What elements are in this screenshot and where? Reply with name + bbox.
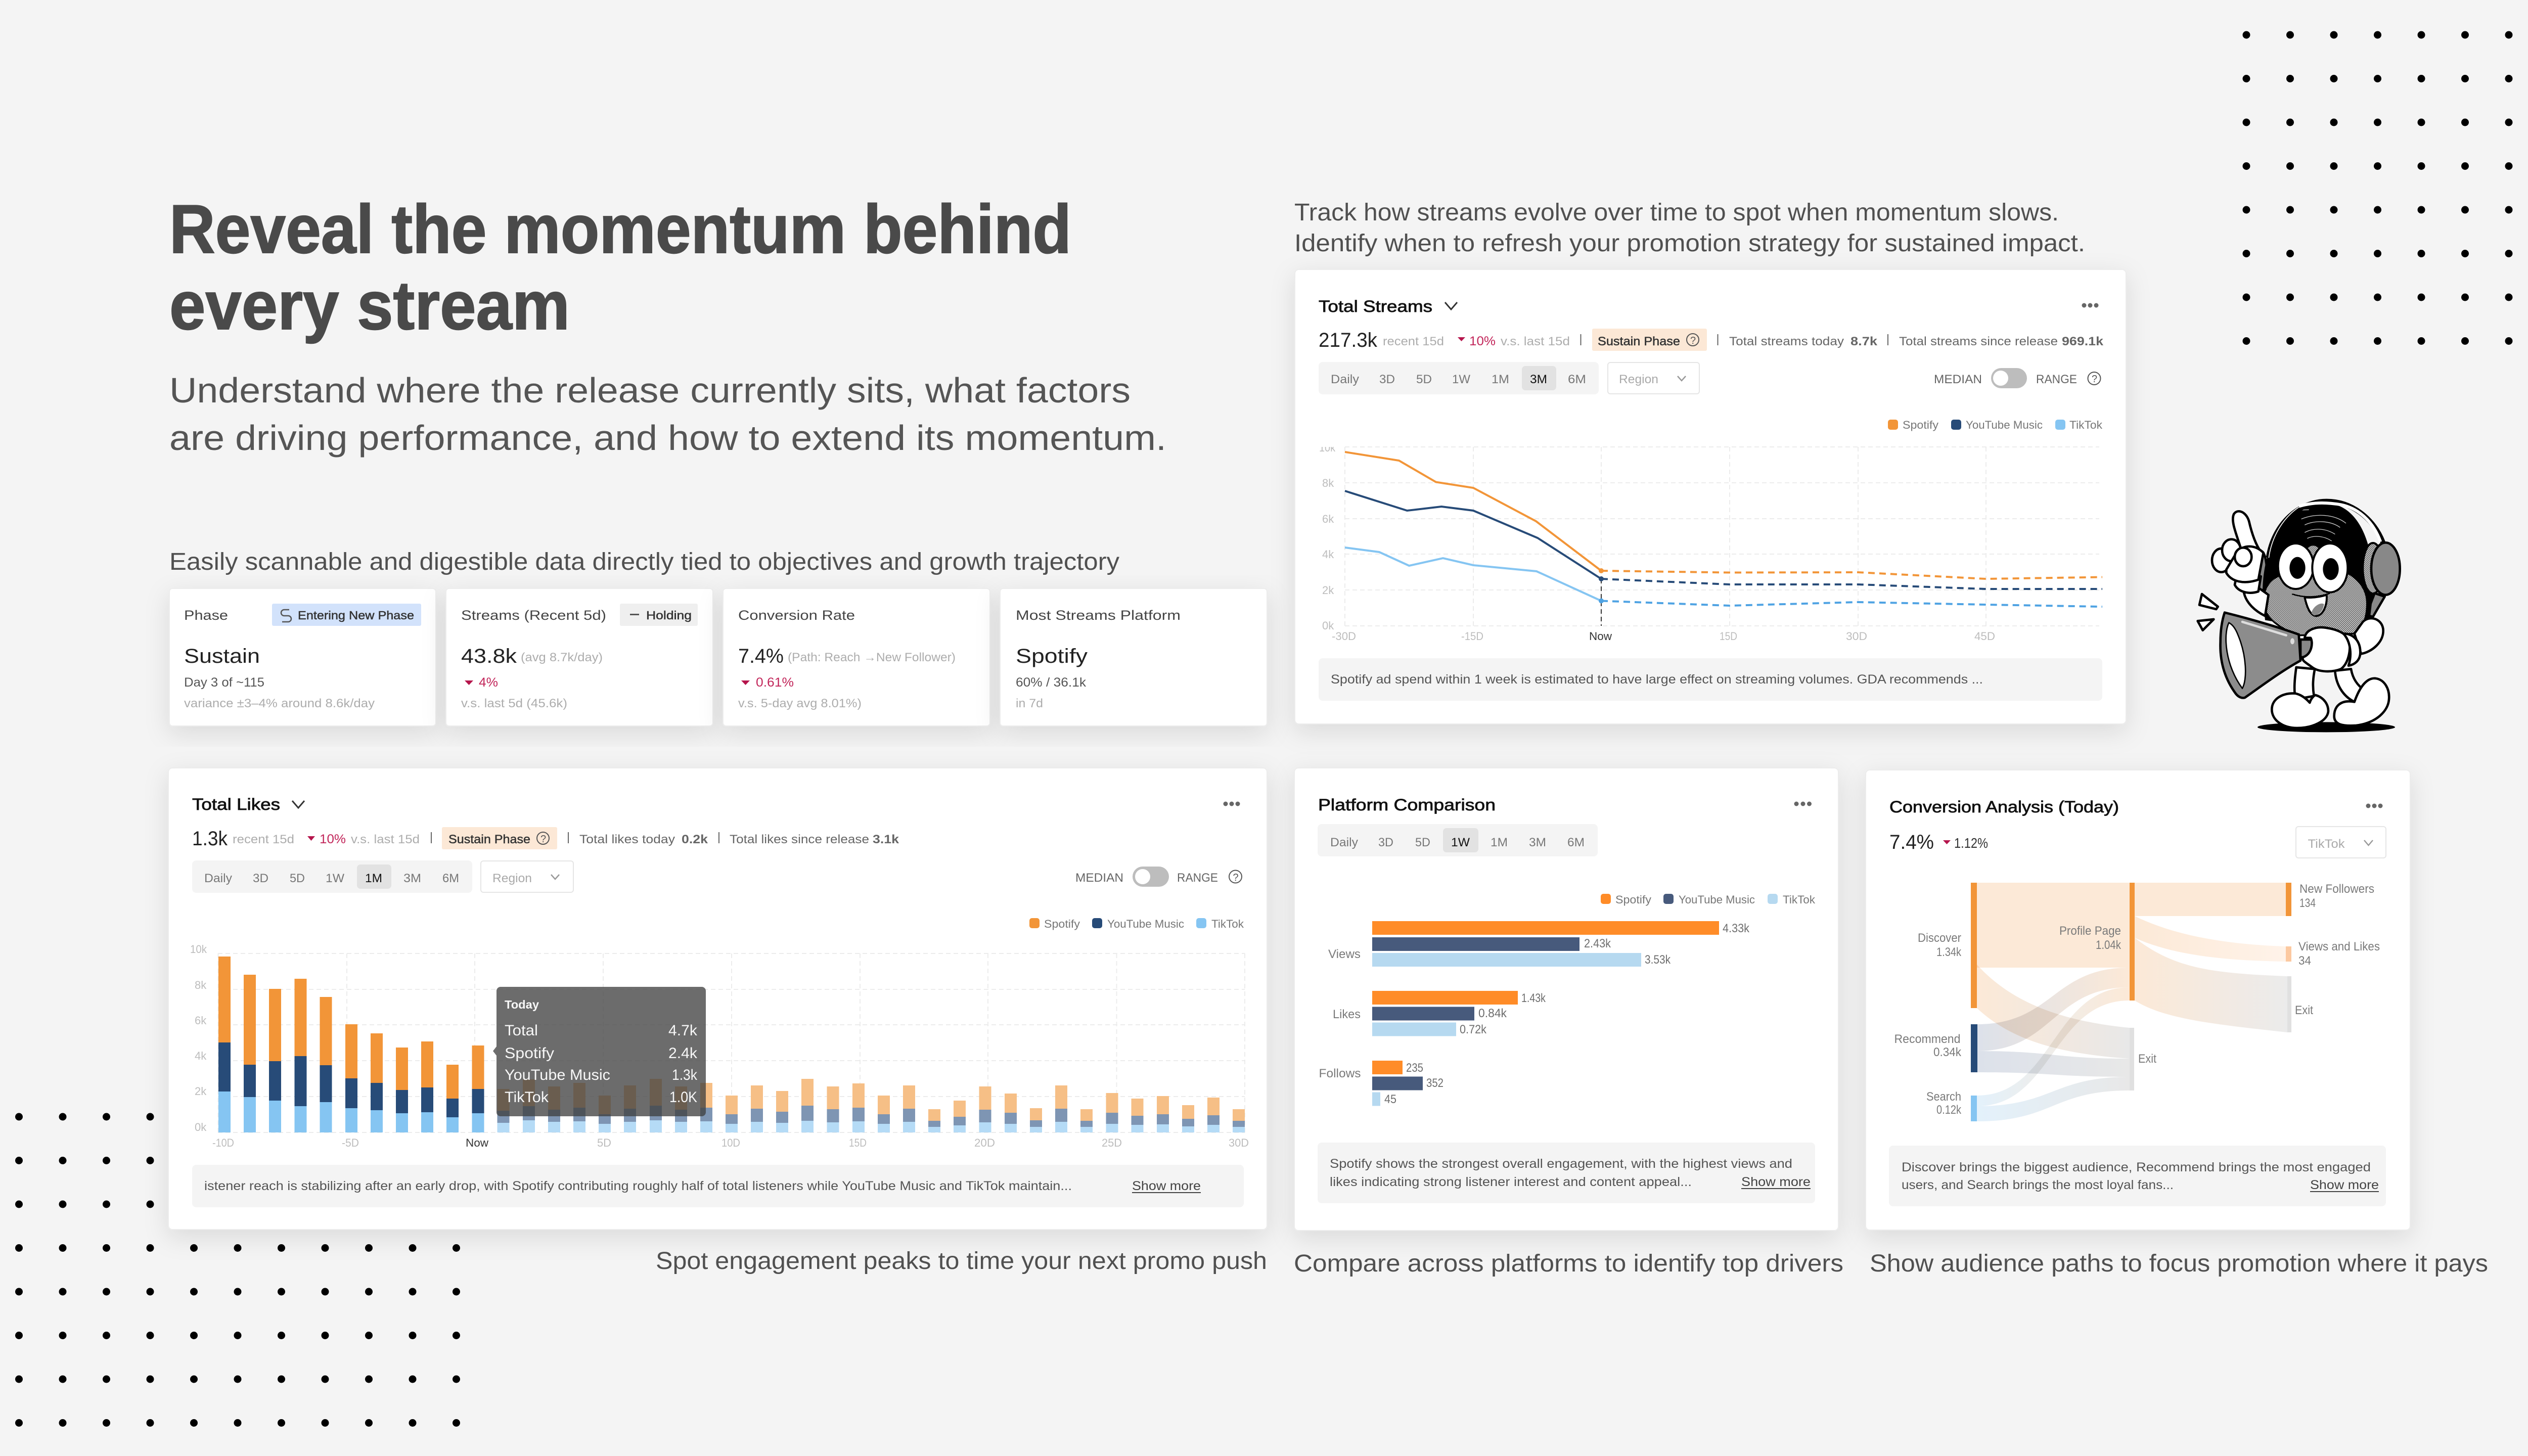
summary row: Total streams since release [1899, 335, 2058, 348]
summary row: Sustain Phase [448, 833, 530, 846]
series: spotify [1345, 452, 2102, 579]
panel: KPI phase: variance ±3–4% around 8.6k/day [184, 697, 375, 710]
node labels [1894, 882, 2380, 1117]
title: every stream [169, 267, 570, 344]
group: views: Views [1328, 947, 1361, 961]
y axis labels: 10k [1319, 441, 1336, 454]
x axis labels: Now [466, 1136, 488, 1149]
y axis labels: 6k [195, 1014, 207, 1027]
x axis labels: -30D [1332, 630, 1356, 643]
time range tabs: Daily [1331, 373, 1359, 386]
insight text: Show more [1741, 1175, 1811, 1189]
more menu [2082, 303, 2098, 307]
heading: Total Likes [192, 795, 280, 813]
panel: KPI conversion rate [723, 588, 990, 726]
platform dropdown [2296, 827, 2386, 858]
panel: KPI streams: v.s. last 5d (45.6k) [461, 697, 567, 710]
x axis labels: 25D [1102, 1136, 1122, 1149]
time range tabs: 5D [1415, 836, 1430, 849]
y axis labels: 0k [1322, 619, 1334, 632]
summary row: recent 15d [1383, 335, 1444, 348]
x axis labels: 15D [1720, 630, 1737, 643]
group: likes [1333, 991, 1546, 1036]
tooltip: Total [505, 1022, 538, 1039]
time range tabs: Daily [204, 872, 232, 885]
group: likes: 1.43k [1521, 991, 1546, 1005]
node labels: New Followers [2299, 882, 2374, 896]
tooltip: 1.3k [672, 1067, 698, 1083]
region dropdown [481, 861, 573, 892]
summary row: 10% [1469, 334, 1496, 348]
time range tabs: 3M [403, 872, 421, 885]
caption: conversion analysis: Show audience paths to focus promotion where it pays [1870, 1250, 2488, 1277]
series: tiktok [1345, 548, 2102, 607]
conversion value: 7.4% [1889, 831, 1934, 853]
group: follows: 352 [1426, 1076, 1443, 1090]
group: views [1328, 921, 1750, 967]
panel: KPI platform [1000, 588, 1267, 726]
time range tabs [192, 860, 472, 893]
panel: KPI conversion rate: Conversion Rate [738, 608, 855, 623]
x axis labels: -5D [342, 1136, 359, 1149]
node labels: Discover [1918, 931, 1961, 945]
tooltip: YouTube Music [505, 1067, 610, 1083]
x axis labels: -15D [1461, 630, 1483, 643]
platform dropdown: TikTok [2308, 837, 2345, 851]
group: likes: Likes [1333, 1008, 1361, 1021]
panel: KPI platform: in 7d [1016, 697, 1043, 710]
median range toggle: ? [1233, 872, 1239, 883]
node labels: Exit [2138, 1052, 2156, 1066]
y axis labels: 0k [195, 1121, 207, 1133]
time range tabs: 1M [1492, 373, 1509, 386]
title [169, 191, 1071, 344]
median range toggle: RANGE [1177, 871, 1218, 885]
x axis labels: 30D [1846, 630, 1867, 643]
panel: KPI conversion rate: 0.61% [756, 675, 794, 690]
panel: platform comparison [1294, 768, 1838, 1231]
node labels: 0.34k [1933, 1045, 1962, 1059]
caption: total streams [1294, 199, 2085, 257]
more menu [2366, 804, 2382, 808]
y axis labels: 10k [190, 943, 207, 956]
caption: total streams: Identify when to refresh your promotion strategy for sustained impact. [1294, 230, 2085, 257]
legend [1029, 918, 1244, 930]
panel: KPI conversion rate: 7.4% [738, 645, 784, 667]
mascot: vinyl character with megaphone [2198, 502, 2400, 732]
summary row: ? [1690, 335, 1696, 346]
insight text: istener reach is stabilizing after an early drop, with Spotify contributing roughly half of total listeners while YouTube Music and TikTok maintain... [204, 1179, 1072, 1193]
insight text: Show more [1132, 1179, 1201, 1193]
time range tabs: 1W [1452, 373, 1470, 386]
y axis labels: 4k [195, 1050, 207, 1062]
insight text: likes indicating strong listener interest and content appeal... [1330, 1175, 1692, 1189]
time range tabs: 1M [1491, 836, 1508, 849]
insight text: Spotify ad spend within 1 week is estimated to have large effect on streaming volumes. GDA recommends ... [1331, 672, 1983, 687]
region dropdown: Region [1619, 373, 1658, 386]
summary row: Total streams today [1729, 335, 1844, 348]
badge: entering new phase: Entering New Phase [298, 609, 414, 622]
bars: forecast faded [498, 1079, 1245, 1132]
panel: KPI phase: Phase [184, 608, 228, 623]
node labels: 1.04k [2096, 938, 2121, 952]
heading [192, 795, 304, 813]
time range tabs: 1W [1451, 836, 1470, 849]
node labels: Profile Page [2059, 924, 2121, 938]
summary row: 3.1k [873, 833, 899, 846]
sankey diagram [1894, 882, 2380, 1121]
panel: KPI platform: Spotify [1016, 645, 1088, 667]
group: likes: 0.84k [1478, 1007, 1507, 1020]
y axis labels [190, 943, 207, 1133]
stacked bar chart [190, 943, 1249, 1149]
conversion value: 1.12% [1954, 835, 1988, 851]
panel: KPI streams: (avg 8.7k/day) [521, 651, 603, 664]
x axis labels [212, 1136, 1249, 1149]
legend: TikTok [1211, 918, 1244, 930]
bars: history solid [218, 957, 484, 1132]
legend: Spotify [1615, 893, 1651, 906]
tooltip: TikTok [505, 1089, 549, 1106]
time range tabs: 6M [442, 872, 459, 885]
node labels: Search [1926, 1090, 1961, 1104]
insight text [192, 1165, 1244, 1207]
panel: KPI phase [169, 588, 436, 726]
heading: Platform Comparison [1318, 796, 1496, 814]
time range tabs: 1M [365, 872, 382, 885]
x axis labels: 10D [721, 1136, 740, 1149]
panel: KPI platform: 60% / 36.1k [1016, 675, 1087, 690]
subtitle [169, 371, 1166, 458]
panel: KPI phase: Sustain [184, 645, 260, 667]
summary row: Sustain Phase [1598, 335, 1680, 348]
summary row: 8.7k [1850, 335, 1878, 348]
y axis labels: 2k [195, 1085, 207, 1098]
node labels: 0.12k [1936, 1103, 1962, 1117]
x axis labels: Now [1589, 630, 1612, 643]
title: Reveal the momentum behind [169, 191, 1071, 267]
insight text: Discover brings the biggest audience, Recommend brings the most engaged [1902, 1160, 2371, 1174]
time range tabs: 3D [253, 872, 268, 885]
median range toggle [1934, 368, 2100, 388]
caption: total likes: Spot engagement peaks to time your next promo push [656, 1248, 1267, 1275]
x axis labels: 5D [597, 1136, 611, 1149]
insight text: Show more [2310, 1178, 2379, 1192]
legend: YouTube Music [1679, 893, 1755, 906]
node labels: 1.34k [1936, 945, 1962, 959]
group: follows: 235 [1406, 1061, 1423, 1075]
node labels: Views and Likes [2298, 940, 2380, 953]
time range tabs [1318, 824, 1598, 856]
summary row: 1.3k [192, 828, 228, 850]
summary row: 0.2k [682, 833, 708, 846]
y axis labels: 4k [1322, 548, 1334, 561]
heading: Total Streams [1319, 297, 1432, 315]
tooltip: Spotify [505, 1045, 554, 1062]
panel: KPI streams: 43.8k [461, 645, 517, 667]
y axis labels [1320, 447, 1335, 629]
subtitle: are driving performance, and how to extend its momentum. [169, 418, 1166, 458]
panel: KPI platform: Most Streams Platform [1016, 608, 1181, 623]
x axis labels: 30D [1229, 1136, 1249, 1149]
legend: Spotify [1044, 918, 1080, 930]
summary row [192, 827, 899, 850]
legend: TikTok [2069, 419, 2103, 431]
time range tabs: 3M [1529, 836, 1546, 849]
caption: total streams: Track how streams evolve over time to spot when momentum slows. [1294, 199, 2059, 226]
time range tabs: 3M [1530, 373, 1547, 386]
insight text: Spotify shows the strongest overall engagement, with the highest views and [1330, 1157, 1792, 1171]
median range toggle [1075, 867, 1242, 887]
region dropdown: Region [492, 872, 532, 885]
panel: total streams [1295, 269, 2126, 724]
badge: holding: Holding [646, 609, 692, 622]
summary row: 10% [320, 832, 346, 846]
y axis labels: 2k [1322, 584, 1334, 597]
more menu [1224, 802, 1240, 806]
panel: KPI streams [446, 588, 713, 726]
node labels: Exit [2295, 1004, 2313, 1017]
legend: YouTube Music [1966, 419, 2043, 431]
insight text [1318, 1143, 1815, 1203]
summary row [1319, 329, 2104, 351]
summary row: Total likes today [579, 833, 675, 846]
region dropdown [1608, 362, 1699, 394]
time range tabs [1319, 362, 1599, 394]
group: likes: 0.72k [1460, 1023, 1487, 1036]
time range tabs: 5D [290, 872, 305, 885]
x axis labels: 45D [1974, 630, 1995, 643]
legend [1601, 893, 1816, 906]
tooltip: 1.0K [669, 1089, 697, 1106]
x axis labels: 20D [974, 1136, 995, 1149]
summary row: v.s. last 15d [1501, 335, 1570, 348]
series: youtube music [1345, 491, 2102, 589]
node labels: Recommend [1894, 1032, 1961, 1046]
horizontal bar chart [1319, 921, 1750, 1106]
legend: TikTok [1783, 893, 1816, 906]
heading: Conversion Analysis (Today) [1889, 798, 2119, 816]
time range tabs: 3D [1379, 373, 1395, 386]
time range tabs: 5D [1416, 373, 1432, 386]
conversion value [1889, 831, 1988, 853]
summary row: Total likes since release [730, 833, 869, 846]
median range toggle: MEDIAN [1075, 871, 1123, 885]
panel: KPI streams: 4% [479, 675, 498, 690]
group: views: 4.33k [1723, 922, 1750, 935]
badge: holding [620, 604, 698, 626]
node labels: 34 [2298, 954, 2311, 968]
time range tabs: 1W [326, 872, 344, 885]
caption: platform comparison: Compare across platforms to identify top drivers [1294, 1250, 1843, 1277]
median range toggle: ? [2092, 374, 2097, 385]
more menu [1794, 802, 1812, 806]
insight text [1889, 1146, 2386, 1206]
y axis labels: 8k [195, 979, 207, 991]
legend: YouTube Music [1107, 918, 1184, 930]
summary row: 217.3k [1319, 329, 1378, 351]
group: follows [1319, 1061, 1443, 1106]
nodes [1971, 883, 2291, 1121]
group: follows: 45 [1384, 1093, 1396, 1106]
line chart [1319, 441, 2102, 643]
node labels: 134 [2299, 896, 2316, 910]
y axis labels: 8k [1322, 477, 1334, 489]
legend [1888, 419, 2103, 431]
caption: KPI row: Easily scannable and digestible data directly tied to objectives and growth trajectory [169, 549, 1119, 575]
time range tabs: Daily [1330, 836, 1358, 849]
x axis labels [1332, 630, 1995, 643]
group: follows: Follows [1319, 1067, 1361, 1080]
tooltip: Today [505, 998, 539, 1011]
median range toggle: RANGE [2036, 373, 2077, 386]
summary row: 969.1k [2062, 335, 2104, 348]
panel: KPI streams: Streams (Recent 5d) [461, 608, 606, 623]
summary row: v.s. last 15d [351, 833, 420, 846]
panel: KPI conversion rate: v.s. 5-day avg 8.01%) [738, 697, 862, 710]
tooltip: 4.7k [668, 1022, 698, 1039]
panel: conversion analysis [1866, 770, 2410, 1230]
badge: entering new phase [272, 604, 421, 626]
time range tabs: 6M [1568, 373, 1586, 386]
panel: KPI phase: Day 3 of ~115 [184, 675, 264, 690]
summary row: ? [540, 834, 546, 845]
x axis labels: -10D [212, 1136, 234, 1149]
subtitle: Understand where the release currently sits, what factors [169, 371, 1131, 410]
legend: Spotify [1903, 419, 1938, 431]
tooltip: 2.4k [668, 1045, 698, 1062]
group: views: 3.53k [1645, 953, 1671, 967]
insight text [1319, 658, 2102, 701]
panel: total likes [168, 768, 1267, 1230]
panel: KPI conversion rate: (Path: Reach →New Follower) [788, 651, 956, 664]
group: views: 2.43k [1584, 937, 1611, 950]
tooltip [493, 987, 706, 1116]
x axis labels: 15D [849, 1136, 867, 1149]
time range tabs: 6M [1567, 836, 1585, 849]
time range tabs: 3D [1378, 836, 1393, 849]
y axis labels: 6k [1322, 513, 1334, 525]
median range toggle: MEDIAN [1934, 373, 1982, 386]
insight text: users, and Search brings the most loyal fans... [1902, 1178, 2174, 1192]
summary row: recent 15d [233, 833, 294, 846]
flows [1977, 883, 2287, 1121]
